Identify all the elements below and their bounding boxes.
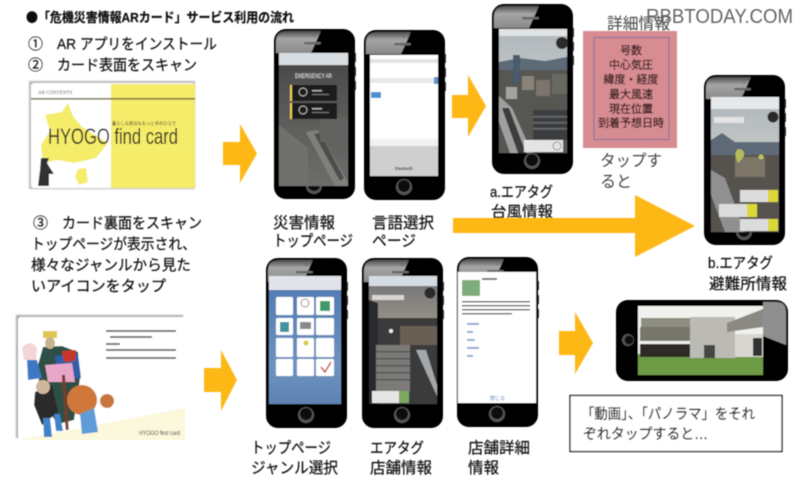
phone: air tag a typhoon <box>492 4 574 174</box>
panel: typhoon detail list <box>583 31 677 148</box>
callout: tap video and panorama <box>570 396 782 452</box>
step 3 text: トップページが表示され、 <box>31 236 196 253</box>
label: air tag b <box>708 255 787 293</box>
callout: tap video and panorama: ぞれタップすると… <box>583 426 708 443</box>
label: shop details <box>468 439 530 477</box>
list item: shelter 3 <box>740 219 778 231</box>
phone: air tag b shelter <box>704 75 786 245</box>
phone: disaster top page <box>274 29 356 199</box>
label: air tag a <box>490 184 553 221</box>
menu button: typhoon <box>290 85 337 101</box>
panel: typhoon detail list: 現在位置 <box>609 102 653 116</box>
panel: typhoon detail list: 号数 <box>620 44 642 57</box>
phone: shop detail <box>457 257 539 427</box>
label: genre selection <box>251 439 338 477</box>
title: ●「危機災害情報ARカード」サービス利用の流れ <box>26 7 294 26</box>
label: shop details: 店舗詳細 <box>468 439 530 457</box>
label: air tag a: 台風情報 <box>491 203 553 221</box>
card back logo: HYOGO find card <box>139 431 180 437</box>
icon grid <box>276 297 334 376</box>
label: shop details: 情報 <box>468 459 499 477</box>
step 2 text: ② <box>28 57 43 74</box>
silhouette figure <box>38 158 54 186</box>
step 3 text: カード裏面をスキャン <box>62 215 202 232</box>
label: disaster top page <box>273 214 353 250</box>
phone: genre selection <box>266 258 348 428</box>
step 3 text <box>31 215 202 295</box>
card logo text: HYOGO find card <box>48 124 178 149</box>
card back description lines <box>106 330 176 359</box>
watermark: RBBTODAY.COM <box>646 6 793 28</box>
panel: typhoon detail list: 到着予想日時 <box>598 116 664 130</box>
label: air tag b: 避難所情報 <box>709 275 787 293</box>
step 3 text: 様々なジャンルから見た <box>31 257 191 274</box>
step 3 text: ③ <box>33 215 48 232</box>
picker value: Deutsch <box>395 166 413 171</box>
arrow: card to phones <box>223 124 257 183</box>
label: language selection: 言語選択 <box>372 214 434 232</box>
arrow: to air tag a <box>452 75 486 137</box>
close link: 閉じる <box>490 396 505 402</box>
card: HYOGO find card front <box>29 81 195 189</box>
step 1 text: ① <box>28 36 43 53</box>
text: tap: タップす <box>600 152 662 170</box>
card: HYOGO find card back <box>16 315 185 440</box>
label: disaster top page: トップページ <box>273 232 353 250</box>
label: genre selection: トップページ <box>251 439 331 457</box>
text: tap <box>600 152 662 191</box>
label: air tag b: b.エアタグ <box>708 255 773 272</box>
list item: shelter 2 <box>719 204 757 217</box>
arrow: to landscape phone <box>559 312 593 374</box>
arrow: card back to phones <box>204 350 237 411</box>
detail info heading: 詳細情報 <box>607 15 670 33</box>
list item: shelter 1 <box>740 190 778 202</box>
step 3 text: いアイコンをタップ <box>31 278 166 295</box>
panel: typhoon detail list: 緯度・経度 <box>604 73 658 86</box>
label: language selection: ページ <box>372 233 416 250</box>
text: tap: ると <box>600 174 632 191</box>
label: air tag a: a.エアタグ <box>490 184 553 201</box>
app title: EMERGENCY AR <box>295 73 332 80</box>
label: shop air tag <box>370 440 432 477</box>
label: shop air tag: エアタグ <box>370 440 424 457</box>
step 1 text: AR アプリをインストール <box>57 36 217 53</box>
illustration: band of characters <box>22 331 114 437</box>
card header text: AR CONTENTS <box>38 91 73 96</box>
label: disaster top page: 災害情報 <box>273 214 335 232</box>
menu button: shelter <box>290 103 337 119</box>
long arrow to air tag b <box>453 195 695 257</box>
phone: language selection <box>364 30 446 200</box>
callout: tap video and panorama: 「動画」、「パノラマ」をそれ <box>581 406 755 423</box>
phone: air tag shop info <box>362 258 444 428</box>
panel: typhoon detail list: 最大風速 <box>609 87 653 101</box>
step 2 text: カード表面をスキャン <box>57 57 197 74</box>
label: shop air tag: 店舗情報 <box>370 459 432 477</box>
map of Hyogo <box>41 103 108 185</box>
label: language selection <box>372 214 434 250</box>
label: genre selection: ジャンル選択 <box>251 459 338 477</box>
panel: typhoon detail list: 中心気圧 <box>609 58 653 72</box>
card tagline: 暮らしも防災ももっと手のひらで <box>112 120 176 127</box>
landscape phone with panorama <box>616 300 788 381</box>
